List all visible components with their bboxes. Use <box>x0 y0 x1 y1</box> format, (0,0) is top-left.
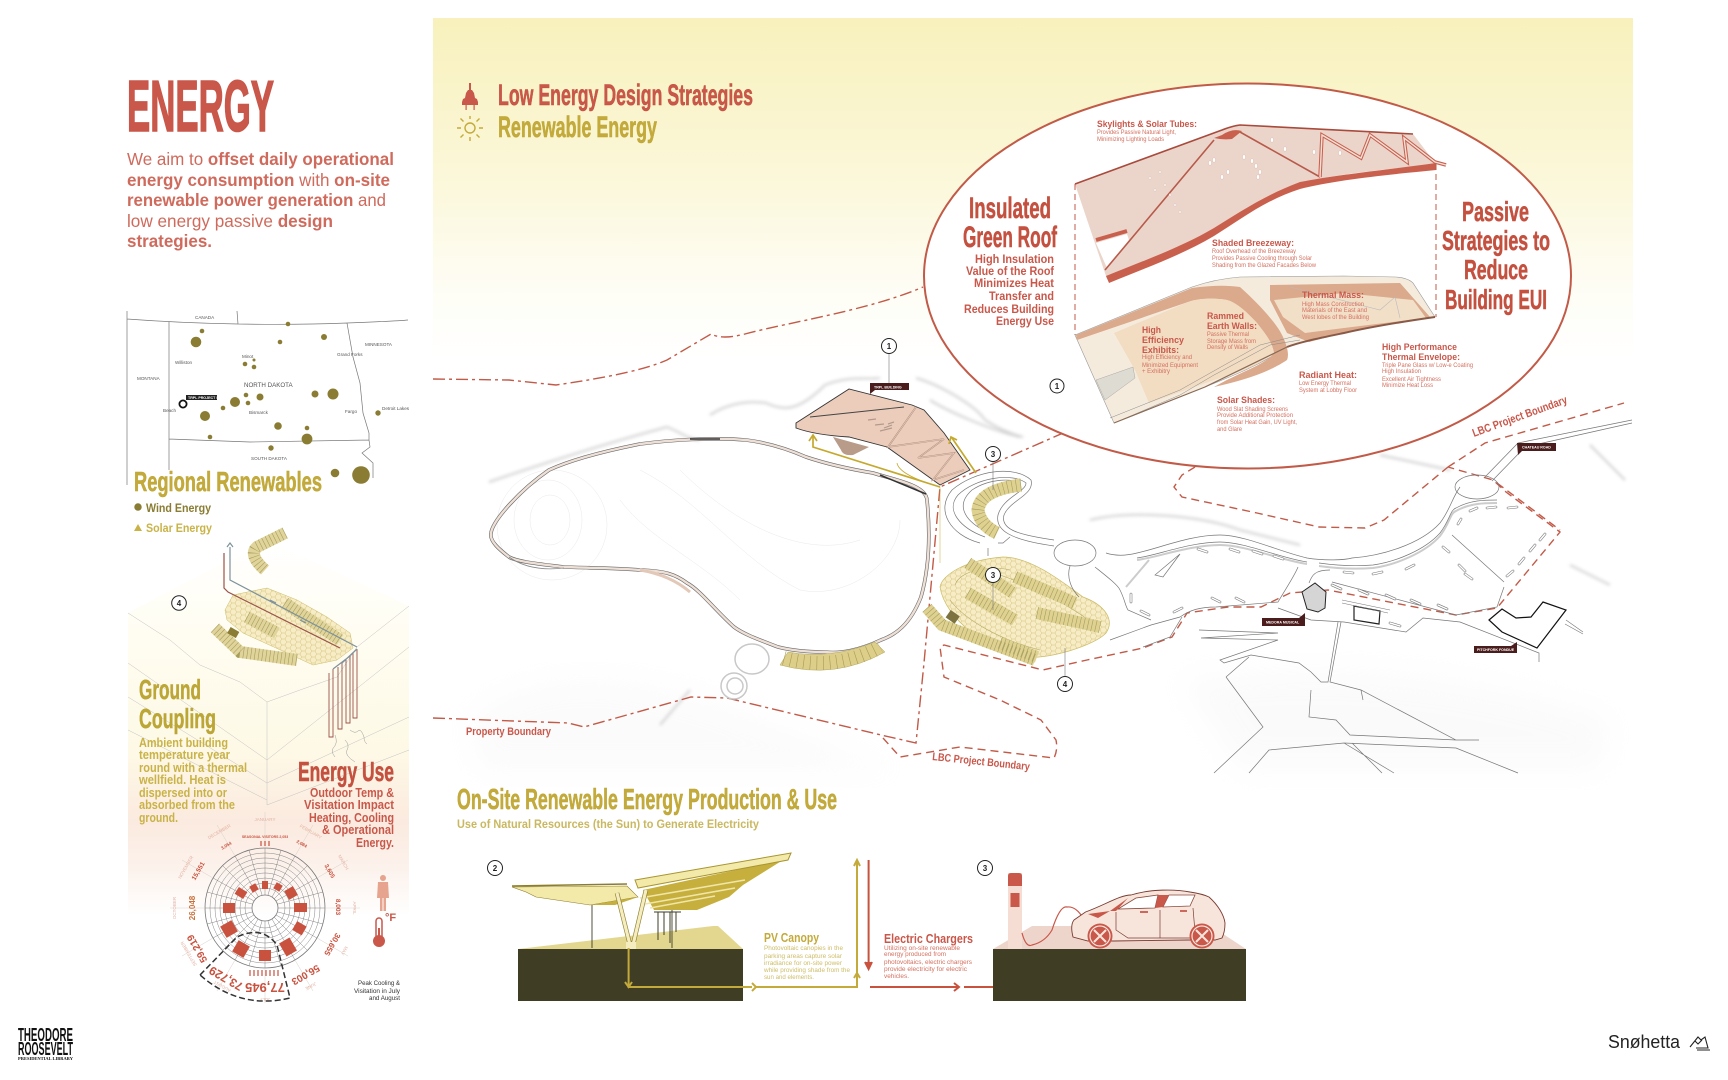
text: ground coupling description <box>138 736 247 825</box>
annotation: solar shades: from Solar Heat Gain, UV Light, <box>1217 419 1297 426</box>
icon: number marker 1 in callout <box>1050 379 1064 393</box>
icon: number marker 4: 4 <box>177 599 182 608</box>
text: ground coupling description: ground. <box>139 811 178 825</box>
chart: month labels: MAY <box>340 945 349 956</box>
annotation: radiant heat: System at Lobby Floor <box>1299 387 1358 394</box>
annotation: shaded breezeway: Provides Passive Cooling through Solar <box>1212 255 1313 262</box>
subheading: Use of Natural Resources (the Sun) to Generate Electricity <box>457 817 759 831</box>
chart: peak period dashed outline <box>200 932 290 1001</box>
legend: wind and solar: Wind Energy <box>146 501 211 515</box>
heading: ground coupling <box>139 674 216 734</box>
museum and outbuildings <box>1302 583 1583 648</box>
icon: sun <box>457 116 483 141</box>
map labels: Fargo <box>345 409 357 414</box>
annotation: high performance thermal envelope <box>1382 342 1473 389</box>
chart: visitation numbers: SEASONAL VISITORS 2,053 <box>242 835 288 839</box>
annotation: rammed earth walls: Rammed <box>1207 311 1244 322</box>
solar canopy arc along ring road <box>780 642 885 670</box>
map labels: MONTANA <box>137 376 161 381</box>
text: insulated green roof description: High Insulation <box>975 254 1054 266</box>
chart: month labels: JANUARY <box>255 817 275 822</box>
label: Pitchfork Fondue: PITCHFORK FONDUE <box>1477 648 1515 652</box>
annotation: high performance thermal envelope: Excellent Air Tightness <box>1382 376 1442 383</box>
annotation: high efficiency exhibits: + Exhibitry <box>1142 368 1171 375</box>
lower parking hex wellfield <box>940 557 1109 657</box>
chart: month labels <box>172 817 357 1002</box>
chart: visitation numbers: 77,945 <box>245 980 285 995</box>
chart: visitor arrows <box>250 841 278 976</box>
logo: Theodore Roosevelt Presidential Library <box>18 1025 74 1061</box>
intro text block <box>127 149 394 251</box>
roads around upper parking <box>945 471 1054 556</box>
project location marker <box>179 395 225 408</box>
building energy arrows <box>809 435 976 563</box>
annotation: solar shades: Provide Additional Protection <box>1217 412 1293 419</box>
intro text block: We aim to offset daily operational <box>127 149 394 169</box>
heading: insulated green roof <box>963 192 1058 254</box>
panel: sky gradient background <box>433 18 1633 358</box>
intro text block: energy consumption with on-site <box>127 170 390 190</box>
annotation: solar shades: and Glare <box>1217 426 1242 433</box>
map labels <box>137 315 410 461</box>
text: ground coupling description: absorbed from the <box>139 798 235 812</box>
annotation: rammed earth walls: Density of Walls <box>1207 344 1249 351</box>
text: energy use description: Energy. <box>356 836 394 850</box>
text: PV canopy: PV Canopy <box>764 931 819 945</box>
annotation: shaded breezeway <box>1212 238 1316 269</box>
heading: insulated green roof: Green Roof <box>963 221 1058 254</box>
PV canopy section illustration <box>512 853 791 1001</box>
heading: energy use: Energy Use <box>298 756 394 787</box>
annotation: high performance thermal envelope: High Insulation <box>1382 368 1421 375</box>
text: insulated green roof description: Value of the Roof <box>966 266 1054 278</box>
heading: passive strategies: Strategies to <box>1442 225 1550 256</box>
intro text block: strategies. <box>127 231 212 251</box>
chart: visitation numbers: 56,003 <box>289 962 321 987</box>
annotation: thermal mass: Thermal Mass: <box>1302 290 1364 301</box>
annotation: shaded breezeway: Shaded Breezeway: <box>1212 238 1294 249</box>
map boundaries <box>127 311 408 485</box>
annotation: high efficiency exhibits: High <box>1142 325 1161 336</box>
text: electric chargers: provide electricity for electric <box>884 966 968 973</box>
text: energy use description: & Operational <box>322 823 394 837</box>
annotation: high efficiency exhibits: Exhibits: <box>1142 345 1179 356</box>
heading: ground coupling: Coupling <box>139 703 216 734</box>
contour lines <box>497 470 900 600</box>
annotation: radiant heat: Low Energy Thermal <box>1299 380 1351 387</box>
callout ellipse <box>924 84 1571 468</box>
panel: passive strategies callout ellipse <box>924 84 1571 468</box>
heading: passive strategies: Building EUI <box>1445 284 1547 315</box>
icon: number marker 3: 3 <box>983 864 988 873</box>
LBC project boundary <box>883 403 1624 758</box>
text: peak cooling note <box>354 980 401 1002</box>
heading: passive strategies: Passive <box>1462 196 1529 227</box>
text: electric chargers <box>884 932 973 980</box>
annotation: high efficiency exhibits: Efficiency <box>1142 335 1185 346</box>
ring road <box>491 439 929 652</box>
annotation: solar shades: Wood Slat Shading Screens <box>1217 406 1289 413</box>
text: PV canopy: sun and elements. <box>764 974 814 981</box>
chart: visitation numbers: 30,655 <box>322 931 342 958</box>
icon: number marker 1 in callout: 1 <box>1055 382 1060 391</box>
heading: insulated green roof: Insulated <box>969 192 1051 225</box>
chart: visitation numbers: 73,729 <box>206 963 245 994</box>
annotation: high efficiency exhibits: Minimized Equipment <box>1142 362 1198 369</box>
parking lanes <box>950 568 1095 650</box>
text: PV canopy: Photovoltaic canopies in the <box>764 945 843 952</box>
text: insulated green roof description: Reduces Building <box>964 304 1054 316</box>
chart: visitation numbers: 3,605 <box>323 863 336 880</box>
chart: month labels: AUGUST <box>213 979 232 993</box>
chart: month labels: NOVEMBER <box>177 854 195 880</box>
legend: wind and solar: Solar Energy <box>146 521 212 535</box>
annotation: solar shades <box>1217 395 1297 433</box>
icon: number marker 3 upper <box>986 446 1000 490</box>
icon: person <box>377 875 389 911</box>
text: energy use description: Outdoor Temp & <box>310 786 394 800</box>
intro text block: low energy passive design <box>127 211 333 231</box>
annotation: rammed earth walls: Storage Mass from <box>1207 338 1256 345</box>
text: peak cooling note: Peak Cooling & <box>358 980 401 987</box>
chart: visitation numbers: 8,003 <box>334 899 341 916</box>
map labels: Williston <box>175 360 193 365</box>
chart: month labels: SEPTEMBER <box>179 940 198 967</box>
chart: month labels: MARCH <box>337 854 350 871</box>
label: LBC project boundary lower: LBC Project Boundary <box>932 751 1031 773</box>
text: PV canopy: irradiance for on-site power <box>764 960 843 967</box>
isometric ground lines <box>128 606 409 805</box>
text: insulated green roof description <box>964 254 1054 328</box>
text: insulated green roof description: Transfer and <box>989 291 1054 303</box>
annotation: thermal mass <box>1302 290 1369 321</box>
annotation: shaded breezeway: Roof Overhead of the Breezeway <box>1212 248 1297 255</box>
text: ground coupling description: round with a thermal <box>139 761 247 775</box>
annotation: thermal mass: Materials of the East and <box>1302 307 1367 314</box>
text: electric chargers: photovoltaics, electric chargers <box>884 959 973 966</box>
annotation: rammed earth walls: Earth Walls: <box>1207 321 1257 332</box>
upper crescent solar <box>978 485 1021 533</box>
map labels: Detroit Lakes <box>382 406 410 411</box>
charging cable <box>1022 907 1083 946</box>
heading: low energy design strategies: Low Energy Design Strategies <box>498 79 753 112</box>
exploded plan axonometric <box>1075 276 1435 423</box>
label: Chateau Road <box>1517 443 1556 455</box>
PV charging spot <box>946 610 960 624</box>
logo: Theodore Roosevelt Presidential Library: PRESIDENTIAL LIBRARY <box>18 1056 74 1061</box>
charger post <box>1008 873 1022 949</box>
icon: number marker 3 upper: 3 <box>991 450 996 459</box>
text: electric chargers: Utilizing on-site renewable <box>884 945 960 952</box>
text: ENERGY <box>127 67 274 147</box>
annotation: skylights: Skylights & Solar Tubes: <box>1097 119 1197 130</box>
text: insulated green roof description: Minimizes Heat <box>974 278 1054 290</box>
icon: number marker 3 <box>978 860 992 876</box>
text: PV canopy: parking areas capture solar <box>764 953 843 960</box>
terrain hill shading <box>470 378 1625 770</box>
icon: number marker 4 <box>1058 648 1072 692</box>
parking islands <box>1131 507 1545 626</box>
chart: visitation numbers: 59,219 <box>185 932 210 964</box>
annotation: skylights <box>1097 119 1197 143</box>
building roof plan <box>796 389 970 485</box>
text: electric chargers: vehicles. <box>884 973 909 980</box>
label: TRPL building <box>870 383 909 394</box>
annotation: skylights: Provides Passive Natural Light, <box>1097 129 1176 136</box>
solar field isometric <box>215 533 353 665</box>
text: peak cooling note: Visitation in July <box>354 988 401 995</box>
text: peak cooling note: and August <box>369 995 400 1002</box>
renewable energy flow arrows <box>625 860 860 991</box>
annotation: shaded breezeway: Shading from the Glazed Facades Below <box>1212 262 1316 269</box>
site plan <box>433 287 1632 773</box>
chart: visitation numbers: 26,048 <box>188 895 197 920</box>
chart: visitation numbers: 2,084 <box>296 839 308 849</box>
icon: number marker 1 <box>882 338 896 383</box>
annotation: solar shades: Solar Shades: <box>1217 395 1275 406</box>
chart: visitation numbers: 3,054 <box>220 840 233 851</box>
property boundary top <box>433 287 923 385</box>
text: electric chargers: Electric Chargers <box>884 932 973 946</box>
logo: Snøhetta: Snøhetta <box>1608 1032 1681 1052</box>
legend: wind and solar <box>134 501 212 535</box>
icon: number marker 3 lower: 3 <box>991 571 996 580</box>
label: property boundary: Property Boundary <box>466 726 552 738</box>
logo: Theodore Roosevelt Presidential Library: ROOSEVELT <box>18 1039 73 1059</box>
road network <box>1054 420 1632 773</box>
annotation: high performance thermal envelope: Thermal Envelope: <box>1382 352 1460 363</box>
icon: plug <box>462 83 478 110</box>
annotation: rammed earth walls: Passive Thermal <box>1207 331 1249 338</box>
text: energy use description: Visitation Impact <box>304 798 395 812</box>
text: energy use description <box>304 786 395 850</box>
annotation: thermal mass: West lobes of the Building <box>1302 314 1369 321</box>
map labels: NORTH DAKOTA <box>244 382 293 389</box>
text: ground coupling description: dispersed into or <box>139 786 227 800</box>
text: ground coupling description: wellfield. Heat is <box>138 773 226 787</box>
chart: month labels: JULY <box>260 997 270 1002</box>
chart: visitation numbers: 15,551 <box>191 861 207 882</box>
annotation: thermal mass: High Mass Construction <box>1302 301 1364 308</box>
annotation: high performance thermal envelope: Triple Pane Glass w/ Low-e Coating <box>1382 362 1473 369</box>
map labels: Grand Forks <box>337 352 363 357</box>
project location marker: TRPL PROJECT SITE <box>188 396 225 400</box>
text: insulated green roof description: Energy Use <box>996 316 1054 328</box>
icon: number marker 1: 1 <box>887 342 892 351</box>
chart: month labels: FEBRUARY <box>299 823 323 840</box>
annotation: high performance thermal envelope: Minimize Heat Loss <box>1382 382 1434 389</box>
roof axonometric <box>1075 125 1446 283</box>
annotation: high efficiency exhibits <box>1142 325 1198 375</box>
logo: Theodore Roosevelt Presidential Library: THEODORE <box>18 1025 73 1045</box>
property boundary bottom <box>433 430 1070 743</box>
annotation: radiant heat <box>1299 370 1358 394</box>
icon: number marker 2 <box>488 860 502 876</box>
map labels: Beach <box>163 408 176 413</box>
annotation: skylights: Minimizing Lighting Loads <box>1097 136 1165 143</box>
icon: number marker 3 lower <box>986 568 1000 610</box>
charger flow arrows <box>865 860 1017 991</box>
text: ground coupling description: Ambient building <box>139 736 228 750</box>
geothermal pipes and arrows <box>224 543 367 762</box>
map labels: SOUTH DAKOTA <box>251 456 288 461</box>
heading: passive strategies: Reduce <box>1464 254 1528 285</box>
icon: number marker 2: 2 <box>493 864 498 873</box>
heading: renewable energy: Renewable Energy <box>498 111 657 144</box>
text: PV canopy <box>763 931 850 981</box>
intro text block: renewable power generation and <box>127 190 386 210</box>
chart: month labels: APRIL <box>352 901 357 915</box>
EV charger section illustration <box>993 873 1246 1001</box>
text: electric chargers: energy produced from <box>884 951 946 958</box>
panel background hexagon <box>128 540 409 1010</box>
icon: number marker 4 <box>172 596 186 610</box>
panel: on-site renewable production and use <box>457 784 1246 1001</box>
label: Chateau Road: CHATEAU ROAD <box>1522 446 1551 450</box>
heading: on-site production: On-Site Renewable Energy Production & Use <box>457 784 837 816</box>
map labels: Bismarck <box>249 410 269 415</box>
heading: regional renewables: Regional Renewables <box>134 466 322 497</box>
label: Medora Musical: MEDORA MUSICAL <box>1266 620 1300 624</box>
chart: month labels: DECEMBER <box>207 823 232 840</box>
legend: design strategies <box>457 79 753 144</box>
annotation: rammed earth walls <box>1207 311 1257 351</box>
chart: visitation numbers <box>185 835 342 995</box>
label: Pitchfork Fondue <box>1474 642 1517 653</box>
text: energy use description: Heating, Cooling <box>309 811 394 825</box>
dashed projection lines <box>1075 164 1436 335</box>
text: PV canopy: while providing shade from the <box>763 967 850 974</box>
label: Medora Musical <box>1262 613 1305 626</box>
label: TRPL building: TRPL BUILDING <box>874 386 902 390</box>
map labels: MINNESOTA <box>365 342 393 347</box>
heading: passive strategies <box>1442 196 1550 315</box>
annotation: radiant heat: Radiant Heat: <box>1299 370 1357 381</box>
icon: thermometer <box>373 912 396 947</box>
overlook ellipses <box>721 644 769 699</box>
map labels: CANADA <box>195 315 215 320</box>
lower parking PV canopy rows <box>927 563 1100 660</box>
text: ground coupling description: temperature year <box>139 748 230 762</box>
electric car <box>1072 890 1225 948</box>
icon: number marker 4: 4 <box>1063 680 1068 689</box>
heading: ground coupling: Ground <box>139 674 201 705</box>
map labels: Minot <box>242 354 254 359</box>
chart: month labels: OCTOBER <box>172 896 177 919</box>
regional renewables map <box>127 311 410 485</box>
skylights <box>1149 138 1342 214</box>
radial chart: visitation and temperature <box>170 812 360 1003</box>
annotation: high performance thermal envelope: High Performance <box>1382 342 1457 353</box>
icon: thermometer: °F <box>385 912 396 924</box>
annotation: high efficiency exhibits: High Efficiency and <box>1142 354 1192 361</box>
chart: monthly heating and cooling blocks <box>220 881 307 961</box>
panel: ground coupling and energy use <box>128 533 409 1010</box>
label: LBC project boundary upper: LBC Project Boundary <box>1471 394 1569 440</box>
wind energy dots <box>191 322 381 484</box>
chart: month labels: JUNE <box>304 981 317 991</box>
